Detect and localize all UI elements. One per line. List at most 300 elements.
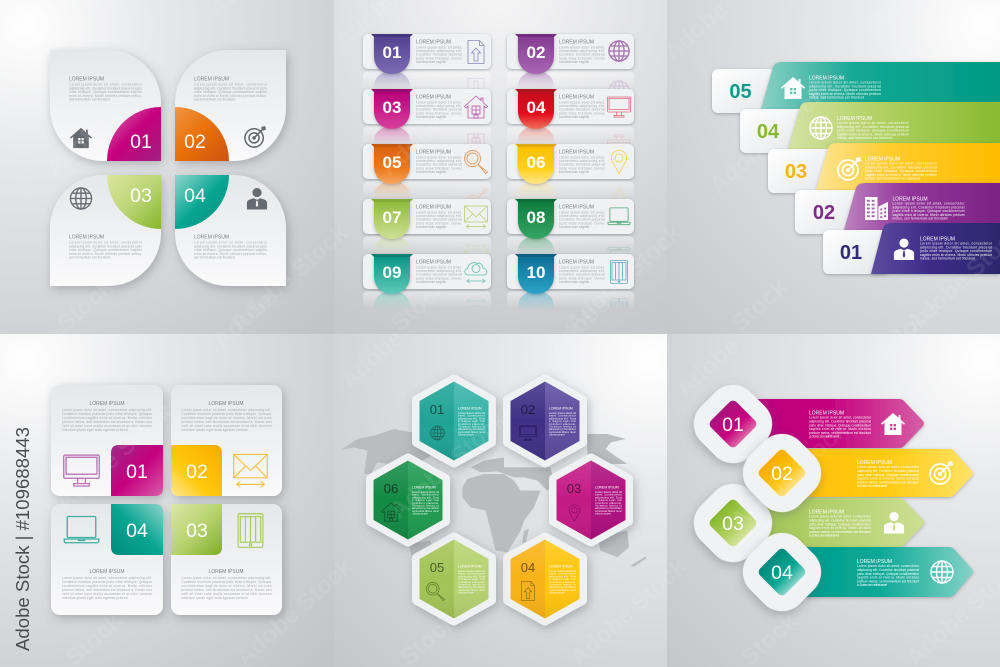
step 01: LOREM IPSUM <box>920 236 955 242</box>
hexagon 06: ullamcorper <box>412 512 428 516</box>
hexagon 01: adipiscing Curabitur <box>458 427 485 431</box>
watermark: Adobe Stock <box>704 81 832 199</box>
hexagon 01: commodo libero nunc <box>458 430 486 434</box>
hexagon 03: amet, consectetur <box>595 493 622 497</box>
ribbon row 07 and 08 <box>362 198 636 254</box>
ribbon row 03 and 04: condimentum sagittis <box>416 115 446 119</box>
ribbon row 09 and 10: consectetur adipiscing elit. <box>559 269 605 273</box>
hexagon 01: adipiscing elit. Duis <box>458 416 486 420</box>
diamond 04 <box>733 523 831 621</box>
ribbon row 07 and 08: consectetur adipiscing elit. <box>559 214 605 218</box>
square 04: condimentum sagittis enim at viverra. Morbi ultricies <box>62 584 152 588</box>
hexagon 04: amet, consectetur <box>549 572 576 576</box>
hexagon 06: commodo libero nunc <box>412 509 440 513</box>
ribbon row 01 and 02: condimentum sagittis <box>559 60 589 64</box>
step 04: 04 <box>757 121 780 143</box>
arrow 04: Lorem ipsum dolor sit amet, consectetur <box>857 564 920 568</box>
petal card 03: sed fermentum est tincidunt. <box>69 256 111 260</box>
ribbon row 05 and 06: LOREM IPSUM <box>559 150 594 156</box>
ribbon row 05 and 06: LOREM IPSUM <box>416 150 451 156</box>
ribbon row 03 and 04: 04 <box>527 98 546 117</box>
petal card 04: enim at viverra. Morbi ultricies pretium metus, <box>194 252 267 256</box>
ribbon row 09 and 10: Curabitur tincidunt placerat <box>559 273 605 277</box>
step 03 <box>768 143 1000 193</box>
square 01 <box>51 385 163 496</box>
watermark: Adobe <box>671 332 745 402</box>
ribbon row 03 and 04: Curabitur tincidunt placerat <box>416 108 462 112</box>
ribbon row 01 and 02: condimentum sagittis <box>416 60 446 64</box>
arrow 01: sagittis enim at viverra. Morbi ultricies <box>809 427 871 431</box>
petal card 02: LOREM IPSUM <box>194 76 229 82</box>
hexagon 06: tincidunt placerat. <box>412 501 439 505</box>
hexagon 05: amet, consectetur <box>458 572 485 576</box>
hexagon 06: Lorem ipsum dolor sit <box>412 490 439 494</box>
petal card 03: Lorem ipsum dolor sit amet, consectetur <box>69 240 143 244</box>
hexagon 06 <box>371 458 445 542</box>
hexagon 04: LOREM IPSUM <box>549 564 573 568</box>
ribbon row 01 and 02: consectetur adipiscing elit. <box>416 49 462 53</box>
hexagon 03: ullamcorper <box>595 512 611 516</box>
step 01: 01 <box>840 242 862 264</box>
hexagon 05: Vivamus metus ut <box>458 582 485 586</box>
petal card 01: enim at viverra. Morbi ultricies pretium metus, <box>69 94 142 98</box>
petal card 04 <box>175 175 286 286</box>
ribbon row 05 and 06: Curabitur tincidunt placerat <box>559 163 605 167</box>
hexagon 06: LOREM IPSUM <box>412 486 436 490</box>
square 03: velit sit amet nunc mollis accumsan et at nibh. Aenean <box>182 592 272 596</box>
arrow 03: adipiscing elit. Curabitur tincidunt placerat <box>809 518 871 522</box>
ribbon row 07 and 08: Curabitur tincidunt placerat <box>559 218 605 222</box>
petal card 04: sed fermentum est tincidunt. <box>194 256 236 260</box>
hexagon 01: amet, consectetur <box>458 414 485 418</box>
ribbon row 05 and 06: 05 <box>383 153 401 172</box>
ribbon row 09 and 10: Lorem ipsum dolor sit amet, <box>416 265 462 269</box>
ribbon row 03 and 04: justo vitae tristique. Donec <box>415 111 462 115</box>
square 03 <box>171 504 282 615</box>
ribbon row 09 and 10: Curabitur tincidunt placerat <box>416 273 462 277</box>
square 02: LOREM IPSUM <box>208 401 244 407</box>
hexagon 01: tincidunt placerat. <box>458 422 485 426</box>
step 04 <box>740 102 1000 153</box>
step 01: adipiscing elit. Curabitur tincidunt placerat <box>920 245 992 249</box>
ribbon row 07 and 08: LOREM IPSUM <box>416 205 451 211</box>
ribbon row 05 and 06: Lorem ipsum dolor sit amet, <box>559 155 605 159</box>
arrow 04: a. Donec non velit sit amet <box>857 583 887 587</box>
petal card 03: LOREM IPSUM <box>69 234 104 240</box>
ribbon row 01 and 02: Lorem ipsum dolor sit amet, <box>416 45 462 49</box>
square 01: Lorem ipsum dolor sit amet, consectetur adipiscing elit. <box>62 408 152 412</box>
square 04: Lorem ipsum dolor sit amet, consectetur adipiscing elit. <box>62 576 152 580</box>
ribbon row 05 and 06: consectetur adipiscing elit. <box>559 159 605 163</box>
hexagon 04: commodo libero nunc <box>549 588 577 592</box>
step 04: justo vitae tristique. Quisque condimentum <box>836 129 909 133</box>
step 02: 02 <box>813 202 835 224</box>
hexagon 01: Vivamus metus ut <box>458 424 485 428</box>
arrow 03: a. Donec non velit sit amet <box>809 534 839 538</box>
diamond 01 <box>684 375 782 473</box>
ribbon row 01 and 02: Curabitur tincidunt placerat <box>559 53 605 57</box>
arrow 04: justo vitae tristique. Quisque condimentum <box>856 572 919 576</box>
step 03: adipiscing elit. Curabitur tincidunt placerat <box>865 165 937 169</box>
hexagon 04: adipiscing Curabitur <box>549 585 576 589</box>
step 01: metus, sed fermentum est tincidunt <box>920 257 975 261</box>
ribbon row 01 and 02: Curabitur tincidunt placerat <box>416 53 462 57</box>
petal card 01 <box>50 50 161 161</box>
hexagon 02: adipiscing elit. Duis <box>549 416 577 420</box>
petal card 02: adipiscing elit. Curabitur tincidunt placerat justo <box>194 86 267 90</box>
hexagon 06: adipiscing Curabitur <box>412 506 439 510</box>
arrow 02: pretium metus, sed fermentum est tincidunt <box>857 480 919 484</box>
step 02: adipiscing elit. Curabitur tincidunt placerat <box>892 205 965 209</box>
hexagon 01: a magna eget nisi <box>458 419 485 423</box>
ribbon row 05 and 06: condimentum sagittis <box>416 170 446 174</box>
petal card 01: Lorem ipsum dolor sit amet, consectetur <box>69 82 143 86</box>
ribbon row 05 and 06 <box>362 144 636 199</box>
ribbon row 05 and 06: condimentum sagittis <box>559 170 589 174</box>
petal card 03: vitae tristique. Quisque condimentum sagittis <box>69 248 142 252</box>
ribbon row 01 and 02: justo vitae tristique. Donec <box>415 56 462 60</box>
petal card 02: 02 <box>184 131 206 153</box>
step 05: LOREM IPSUM <box>809 76 844 82</box>
square 04: Curabitur tincidunt placerat justo vitae tristique. Quisque <box>62 580 152 584</box>
arrow 04: LOREM IPSUM <box>857 559 892 565</box>
step 03: Lorem ipsum dolor sit amet, consectetur <box>865 162 938 166</box>
hexagon 02: amet, consectetur <box>549 414 576 418</box>
hexagon 01 <box>417 380 491 462</box>
hexagon 04 <box>508 538 582 620</box>
step 04: Lorem ipsum dolor sit amet, consectetur <box>837 121 910 125</box>
hexagon 06: a magna eget nisi <box>412 498 439 502</box>
petal card 02: Lorem ipsum dolor sit amet, consectetur <box>194 82 268 86</box>
square 04 <box>51 504 163 615</box>
hexagon 03: Lorem ipsum dolor sit <box>595 490 622 494</box>
ribbon row 05 and 06: Curabitur tincidunt placerat <box>416 163 462 167</box>
hexagon 02: a magna eget nisi <box>549 419 576 423</box>
petal card 04: adipiscing elit. Curabitur tincidunt placerat justo <box>194 244 267 248</box>
hexagon 03: a magna eget nisi <box>595 498 622 502</box>
square 02 <box>171 385 282 496</box>
ribbon row 05 and 06: justo vitae tristique. Donec <box>558 166 605 170</box>
ribbon row 07 and 08: condimentum sagittis <box>559 225 589 229</box>
ribbon row 09 and 10: LOREM IPSUM <box>559 260 594 266</box>
petal card 02: enim at viverra. Morbi ultricies pretium metus, <box>194 94 267 98</box>
arrow 01: justo vitae tristique. Quisque condimentum <box>808 423 871 427</box>
step 01 <box>823 223 1000 274</box>
hexagon 01: ullamcorper <box>458 433 474 437</box>
ribbon row 05 and 06: 06 <box>527 153 545 172</box>
arrow 01: adipiscing elit. Curabitur tincidunt placerat <box>809 420 871 424</box>
hexagon 04: Lorem ipsum dolor sit <box>549 569 576 573</box>
arrow 01: pretium metus, sed fermentum est tincidunt <box>809 431 871 435</box>
square 02: pretium metus, sed fermentum est tincidunt a. Donec non <box>182 420 272 424</box>
hexagon 05: adipiscing elit. Duis <box>458 574 486 578</box>
ribbon row 01 and 02: justo vitae tristique. Donec <box>558 56 605 60</box>
hexagon 03: 03 <box>567 481 581 496</box>
diamond 02 <box>733 424 831 522</box>
square 02: condimentum sagittis enim at viverra. Morbi ultricies <box>182 416 272 420</box>
diamond 04: 04 <box>771 562 793 584</box>
ribbon row 03 and 04: Lorem ipsum dolor sit amet, <box>559 100 605 104</box>
square 04: interdum ipsum eget nulla egestas pretium <box>62 596 128 600</box>
ribbon row 09 and 10: justo vitae tristique. Donec <box>558 276 605 280</box>
hexagon 05 <box>417 538 491 620</box>
petal card 02: vitae tristique. Quisque condimentum sagittis <box>194 90 267 94</box>
panel: ten ribbon cards <box>334 0 668 334</box>
ribbon row 03 and 04: LOREM IPSUM <box>559 95 594 101</box>
step 05: Lorem ipsum dolor sit amet, consectetur <box>809 80 882 84</box>
watermark: Stock <box>726 273 793 337</box>
square 03: pretium metus, sed fermentum est tincidunt a. Donec non <box>182 588 272 592</box>
arrow 02: justo vitae tristique. Quisque condimentum <box>856 473 919 477</box>
petal card 02: sed fermentum est tincidunt. <box>194 98 236 102</box>
arrow 04: pretium metus, sed fermentum est tincidunt <box>857 579 919 583</box>
ribbon row 07 and 08: justo vitae tristique. Donec <box>415 221 462 225</box>
ribbon row 01 and 02 <box>362 33 636 89</box>
square 03: Lorem ipsum dolor sit amet, consectetur adipiscing elit. <box>182 576 272 580</box>
ribbon row 01 and 02: 01 <box>383 43 401 62</box>
square 03: LOREM IPSUM <box>208 569 244 575</box>
step 03: sagittis enim at viverra. Morbi ultricies pretium <box>865 173 937 177</box>
diamond 01: 01 <box>722 414 744 436</box>
petal card 02 <box>175 50 286 161</box>
hexagon 01: Lorem ipsum dolor sit <box>458 411 485 415</box>
arrow 03: sagittis enim at viverra. Morbi ultricies <box>809 526 871 530</box>
square 01: interdum ipsum eget nulla egestas pretium <box>62 428 128 432</box>
square 03: interdum ipsum eget nulla egestas pretium <box>182 596 248 600</box>
panel: four arrows with diamonds <box>667 334 1000 667</box>
ribbon row 03 and 04: consectetur adipiscing elit. <box>559 104 605 108</box>
square 04: velit sit amet nunc mollis accumsan et at nibh. Aenean <box>62 592 152 596</box>
ribbon row 03 and 04: Lorem ipsum dolor sit amet, <box>416 100 462 104</box>
ribbon row 01 and 02: 02 <box>527 43 545 62</box>
arrow 03: LOREM IPSUM <box>809 510 844 516</box>
diamond 03: 03 <box>722 513 744 535</box>
step 04: sagittis enim at viverra. Morbi ultricies pretium <box>837 132 909 136</box>
step 05 <box>712 62 1000 113</box>
watermark: Adobe Stock <box>375 63 503 181</box>
hexagon 06: 06 <box>384 481 398 496</box>
hexagon 04: Vivamus metus ut <box>549 582 576 586</box>
hexagon 03: LOREM IPSUM <box>595 486 619 490</box>
square 01: condimentum sagittis enim at viverra. Morbi ultricies <box>62 416 152 420</box>
ribbon row 09 and 10: 09 <box>383 263 401 282</box>
watermark: Adobe Stock <box>560 219 688 337</box>
square 02: velit sit amet nunc mollis accumsan et at nibh. Aenean <box>182 424 272 428</box>
petal card 04: vitae tristique. Quisque condimentum sagittis <box>194 248 267 252</box>
hexagon 05: commodo libero nunc <box>458 588 486 592</box>
arrow 03: pretium metus, sed fermentum est tincidunt <box>809 530 871 534</box>
step 02: sagittis enim at viverra. Morbi ultricies pretium <box>892 213 965 217</box>
ribbon row 01 and 02: consectetur adipiscing elit. <box>559 49 605 53</box>
square 02: interdum ipsum eget nulla egestas pretium <box>182 428 248 432</box>
panel: five stepped bands <box>667 0 1000 334</box>
watermark: Adobe Stock <box>385 406 513 524</box>
ribbon row 07 and 08: justo vitae tristique. Donec <box>558 221 605 225</box>
petal card 04: Lorem ipsum dolor sit amet, consectetur <box>194 240 268 244</box>
arrow 02: a. Donec non velit sit amet <box>857 484 887 488</box>
hexagon 05: adipiscing Curabitur <box>458 585 485 589</box>
step 05: justo vitae tristique. Quisque condimentum <box>808 88 881 92</box>
petal card 04: 04 <box>184 185 206 207</box>
ribbon row 09 and 10: consectetur adipiscing elit. <box>416 269 462 273</box>
step 04: LOREM IPSUM <box>837 116 872 122</box>
ribbon row 03 and 04: LOREM IPSUM <box>416 95 451 101</box>
ribbon row 07 and 08: Curabitur tincidunt placerat <box>416 218 462 222</box>
arrow 01 <box>733 399 924 448</box>
ribbon row 01 and 02: Lorem ipsum dolor sit amet, <box>559 45 605 49</box>
arrow 02 <box>782 449 973 497</box>
ribbon row 05 and 06: justo vitae tristique. Donec <box>415 166 462 170</box>
step 01: justo vitae tristique. Quisque condimentum <box>919 249 992 253</box>
ribbon row 03 and 04: condimentum sagittis <box>559 115 589 119</box>
arrow 03: justo vitae tristique. Quisque condimentum <box>808 522 871 526</box>
step 04: adipiscing elit. Curabitur tincidunt placerat <box>837 125 909 129</box>
step 02: Lorem ipsum dolor sit amet, consectetur <box>892 202 965 206</box>
hexagon 05: LOREM IPSUM <box>458 564 482 568</box>
hexagon 05: tincidunt placerat. <box>458 580 485 584</box>
step 04: metus, sed fermentum est tincidunt <box>837 136 892 140</box>
arrow 01: a. Donec non velit sit amet <box>809 435 839 439</box>
ribbon row 07 and 08: Lorem ipsum dolor sit amet, <box>559 210 605 214</box>
arrow 02: Lorem ipsum dolor sit amet, consectetur <box>857 465 920 469</box>
ribbon row 07 and 08: condimentum sagittis <box>416 225 446 229</box>
arrow 04 <box>782 547 973 597</box>
petal card 01: adipiscing elit. Curabitur tincidunt placerat justo <box>69 86 142 90</box>
square 01: velit sit amet nunc mollis accumsan et at nibh. Aenean <box>62 424 152 428</box>
petal card 01: sed fermentum est tincidunt. <box>69 98 111 102</box>
ribbon row 07 and 08: consectetur adipiscing elit. <box>416 214 462 218</box>
watermark: Adobe <box>335 324 409 394</box>
hexagon 02 <box>508 380 582 462</box>
ribbon row 09 and 10: LOREM IPSUM <box>416 260 451 266</box>
stock id vertical caption: Adobe Stock | #109688443 <box>12 427 33 651</box>
ribbon row 09 and 10 <box>362 254 636 308</box>
petal card 01: vitae tristique. Quisque condimentum sagittis <box>69 90 142 94</box>
petal card 03: enim at viverra. Morbi ultricies pretium metus, <box>69 252 142 256</box>
hexagon 01: LOREM IPSUM <box>458 406 482 410</box>
step 03: justo vitae tristique. Quisque condimentum <box>864 169 937 173</box>
ribbon row 09 and 10: 10 <box>527 263 545 282</box>
step 02: LOREM IPSUM <box>892 196 928 202</box>
watermark: Adobe <box>542 290 616 360</box>
hexagon 04: tincidunt placerat. <box>549 580 576 584</box>
hexagon 05: a magna eget nisi <box>458 577 485 581</box>
step 02: metus, sed fermentum est tincidunt <box>892 217 948 221</box>
hexagon 03: tincidunt placerat. <box>595 501 622 505</box>
watermark: Adobe <box>1 319 75 389</box>
ribbon row 07 and 08: 08 <box>527 208 545 227</box>
hexagon 04: a magna eget nisi <box>549 577 576 581</box>
ribbon row 01 and 02: LOREM IPSUM <box>416 40 451 46</box>
hexagon 04: ullamcorper <box>549 591 565 595</box>
square 03: 03 <box>186 520 208 542</box>
ribbon row 09 and 10: Lorem ipsum dolor sit amet, <box>559 265 605 269</box>
square 02: Curabitur tincidunt placerat justo vitae tristique. Quisque <box>182 412 272 416</box>
arrow 04: adipiscing elit. Curabitur tincidunt placerat <box>857 568 919 572</box>
arrow 01: LOREM IPSUM <box>809 410 844 416</box>
square 01: LOREM IPSUM <box>89 401 125 407</box>
square 04: 04 <box>126 520 148 542</box>
panel: four petals <box>0 0 334 334</box>
square 01: pretium metus, sed fermentum est tincidunt a. Donec non <box>62 420 152 424</box>
ribbon row 09 and 10: justo vitae tristique. Donec <box>415 276 462 280</box>
step 01: sagittis enim at viverra. Morbi ultricies pretium <box>920 253 992 257</box>
square 03: Curabitur tincidunt placerat justo vitae tristique. Quisque <box>182 580 272 584</box>
petal card 03: 03 <box>130 185 152 207</box>
step 05: adipiscing elit. Curabitur tincidunt placerat <box>809 84 881 88</box>
arrow 02: adipiscing elit. Curabitur tincidunt placerat <box>857 469 919 473</box>
square 02: 02 <box>186 461 208 483</box>
panel: six hexagons over world map <box>334 334 668 667</box>
hexagon 03 <box>554 458 628 542</box>
watermark: Stock <box>386 273 453 337</box>
diamond 02: 02 <box>771 463 793 485</box>
step 02: justo vitae tristique. Quisque condimentum <box>892 209 965 213</box>
ribbon row 07 and 08: 07 <box>383 208 401 227</box>
watermark: Stock <box>52 273 119 337</box>
hexagon 06: adipiscing elit. Duis <box>412 495 440 499</box>
hexagon 02: Lorem ipsum dolor sit <box>549 411 576 415</box>
ribbon row 07 and 08: LOREM IPSUM <box>559 205 594 211</box>
ribbon row 09 and 10: condimentum sagittis <box>416 280 446 284</box>
panel: four rounded squares <box>0 334 334 667</box>
world map <box>341 429 647 567</box>
arrow 01: Lorem ipsum dolor sit amet, consectetur <box>809 416 872 420</box>
hexagon 05: ullamcorper <box>458 591 474 595</box>
step 01: Lorem ipsum dolor sit amet, consectetur <box>920 242 993 246</box>
hexagon 03: adipiscing Curabitur <box>595 506 622 510</box>
watermark: Adobe Stock <box>41 63 169 181</box>
watermark: Adobe Stock <box>51 398 179 516</box>
ribbon row 03 and 04: 03 <box>383 98 401 117</box>
square 04: LOREM IPSUM <box>89 569 125 575</box>
hexagon 05: 05 <box>430 560 444 575</box>
ribbon row 05 and 06: Lorem ipsum dolor sit amet, <box>416 155 462 159</box>
arrow 02: LOREM IPSUM <box>857 460 892 466</box>
square 02: Lorem ipsum dolor sit amet, consectetur adipiscing elit. <box>182 408 272 412</box>
step 02 <box>795 183 1000 234</box>
watermark: Adobe <box>871 294 945 364</box>
hexagon 02: LOREM IPSUM <box>549 406 573 410</box>
hexagon 05: Lorem ipsum dolor sit <box>458 569 485 573</box>
hexagon 02: ullamcorper <box>549 433 565 437</box>
square 01: Curabitur tincidunt placerat justo vitae tristique. Quisque <box>62 412 152 416</box>
step 03: 03 <box>785 161 807 183</box>
hexagon 02: Vivamus metus ut <box>549 424 576 428</box>
ribbon row 05 and 06: consectetur adipiscing elit. <box>416 159 462 163</box>
petal card 01: LOREM IPSUM <box>69 76 104 82</box>
petal card 03 <box>50 175 161 286</box>
diamond 03 <box>684 474 782 572</box>
ribbon row 03 and 04: justo vitae tristique. Donec <box>558 111 605 115</box>
hexagon 03: commodo libero nunc <box>595 509 623 513</box>
ribbon row 03 and 04: Curabitur tincidunt placerat <box>559 108 605 112</box>
hexagon 06: amet, consectetur <box>412 493 439 497</box>
arrow 03: Lorem ipsum dolor sit amet, consectetur <box>809 515 872 519</box>
hexagon 02: adipiscing Curabitur <box>549 427 576 431</box>
ribbon row 01 and 02: LOREM IPSUM <box>559 40 594 46</box>
square 03: condimentum sagittis enim at viverra. Morbi ultricies <box>182 584 272 588</box>
arrow 04: sagittis enim at viverra. Morbi ultricies <box>857 576 919 580</box>
hexagon 06: Vivamus metus ut <box>412 504 439 508</box>
hexagon 04: adipiscing elit. Duis <box>549 574 577 578</box>
watermark: Adobe Stock <box>726 416 854 534</box>
arrow 03 <box>733 498 924 547</box>
step 05: metus, sed fermentum est tincidunt <box>809 96 864 100</box>
hexagon 03: Vivamus metus ut <box>595 504 622 508</box>
petal card 01: 01 <box>130 131 152 153</box>
ribbon row 03 and 04 <box>362 88 636 144</box>
